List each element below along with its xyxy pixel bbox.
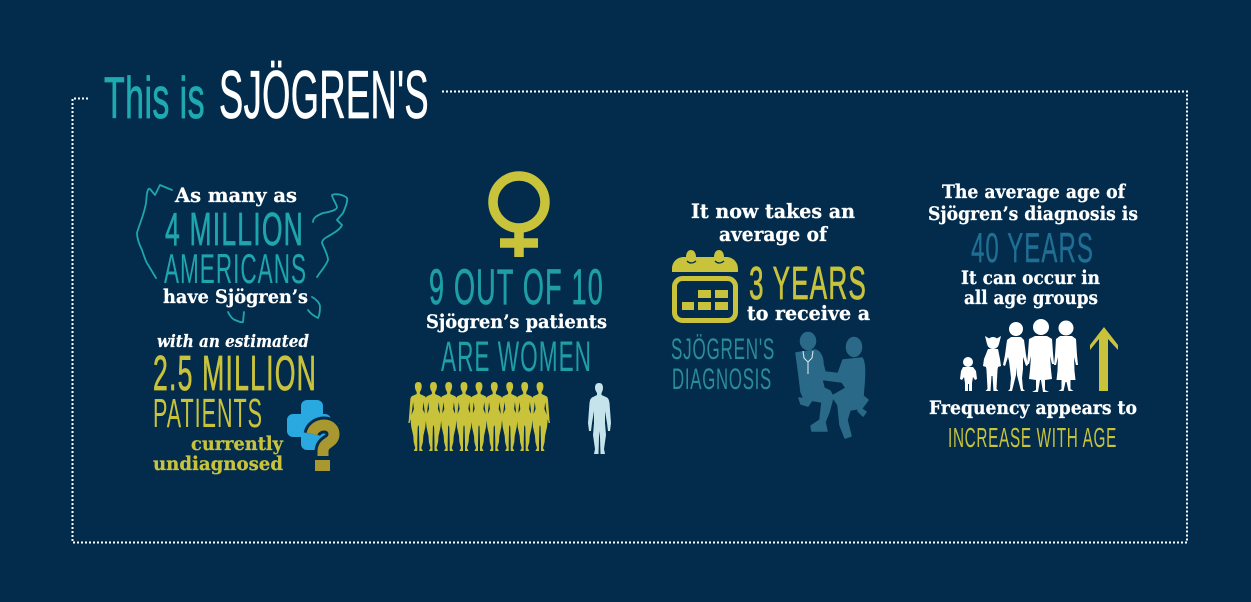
text: it now takes an average of: It now takes an (691, 199, 855, 223)
text: have sjogren's: have Sjögren’s (163, 286, 308, 308)
text: as many as: As many as (174, 183, 297, 207)
text: it now takes an average of: average of (719, 222, 828, 246)
icon: five ages silhouettes (960, 319, 1078, 392)
stat: 3 years: 3 YEARS (749, 257, 867, 309)
text: are women: ARE WOMEN (441, 333, 592, 381)
icon: female symbol (493, 176, 545, 257)
stat: 9 out of 10: 9 OUT OF 10 (429, 259, 604, 315)
text: to receive a: to receive a (747, 301, 870, 325)
text: it now takes an average of (691, 199, 855, 246)
panel: age (928, 181, 1138, 453)
icon: doctor and patient (796, 332, 868, 438)
title: This is (104, 66, 205, 131)
stat: 40 years: 40 YEARS (971, 224, 1094, 271)
panel: diagnosis time (671, 199, 870, 438)
text: undiagnosed: undiagnosed (153, 453, 283, 475)
dotted frame (72, 92, 1187, 542)
title (104, 57, 429, 133)
panel: women (408, 176, 611, 454)
text: average age of: Sjögren’s diagnosis is (928, 203, 1138, 225)
text: average age of: The average age of (942, 181, 1127, 203)
text: sjogren's diagnosis: SJÖGREN'S (671, 333, 775, 366)
text: can occur: It can occur in (961, 267, 1100, 289)
text: patients: PATIENTS (153, 390, 263, 436)
icon: medical cross with question mark (287, 400, 339, 471)
text: increase with age: INCREASE WITH AGE (948, 422, 1117, 453)
panel: americans (137, 183, 347, 475)
stat: 2.5 million: 2.5 MILLION (153, 347, 317, 401)
text: can occur: all age groups (964, 287, 1098, 309)
text: americans: AMERICANS (164, 245, 307, 292)
title: SJÖGREN'S (219, 57, 429, 133)
icon: US map outline (137, 185, 347, 322)
arrow: up (1090, 327, 1118, 391)
text: with an estimated: with an estimated (157, 332, 309, 352)
text: currently: currently (191, 433, 284, 455)
text: sjogren's diagnosis (671, 333, 775, 396)
text: can occur (961, 267, 1100, 309)
text: sjogren's patients: Sjögren’s patients (426, 311, 607, 333)
icon: nine women (408, 382, 550, 451)
icon: man (588, 383, 611, 454)
text: average age of (928, 181, 1138, 225)
text: frequency appears to: Frequency appears to (929, 397, 1137, 419)
stat: 4 million: 4 MILLION (165, 203, 304, 255)
icon: calendar (672, 250, 738, 320)
text: sjogren's diagnosis: DIAGNOSIS (672, 363, 772, 396)
